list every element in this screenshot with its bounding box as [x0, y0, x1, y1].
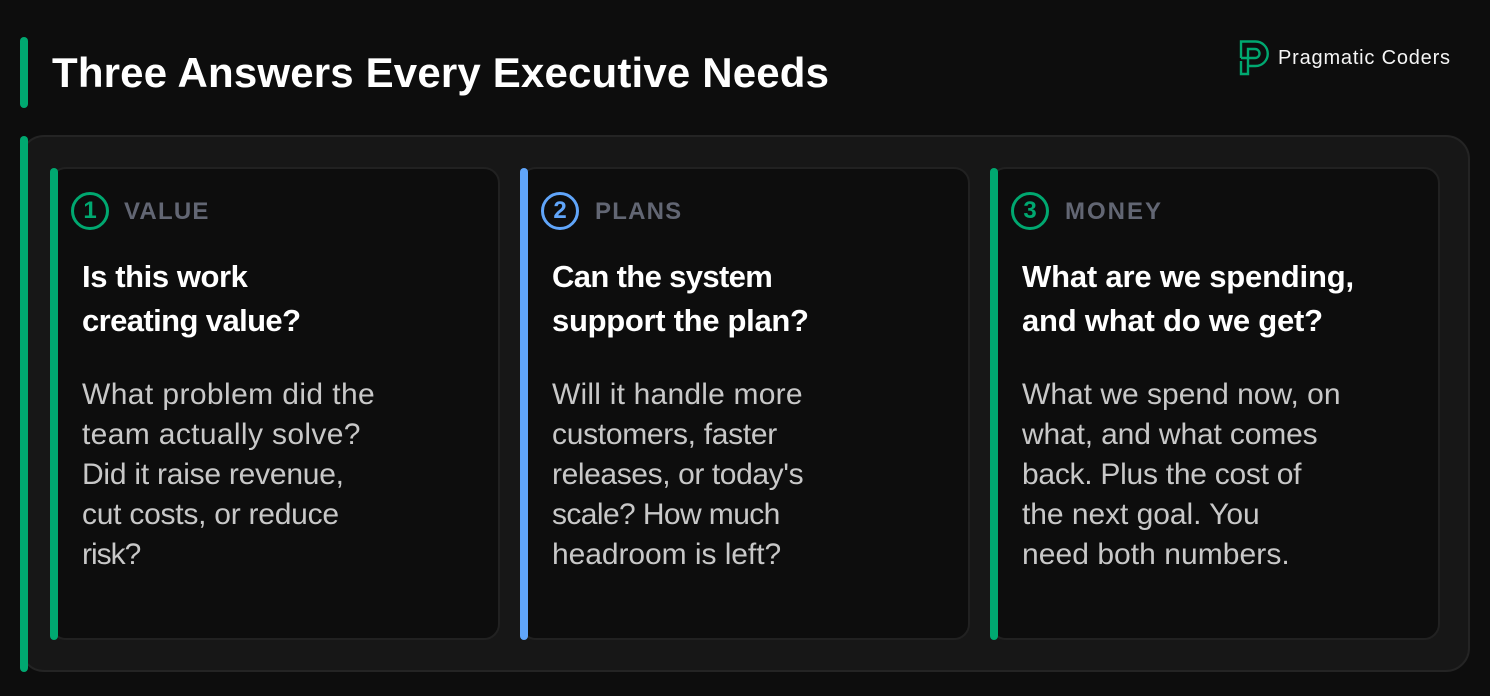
panel: three answers container — [20, 135, 1470, 672]
panel accent bar — [20, 136, 28, 672]
panel: money card — [990, 167, 1440, 640]
body text: releases, or today's — [552, 458, 803, 491]
title: Three Answers Every Executive Needs — [52, 49, 829, 96]
body text: team actually solve? — [82, 418, 361, 451]
question heading: What are we spending, — [1022, 259, 1354, 294]
logo: Pragmatic Coders — [1240, 40, 1451, 76]
number badge 1 — [71, 192, 109, 230]
body text: cut costs, or reduce — [82, 498, 339, 531]
card accent bar — [520, 168, 528, 640]
label: value: VALUE — [124, 198, 210, 225]
title accent bar — [20, 37, 28, 108]
card background — [50, 167, 500, 640]
panel: value card — [50, 167, 500, 640]
body text: need both numbers. — [1022, 538, 1290, 571]
body text: risk? — [82, 538, 140, 571]
question heading: support the plan? — [552, 303, 809, 338]
body text: back. Plus the cost of — [1022, 458, 1301, 491]
logo wordmark: Pragmatic Coders — [1278, 47, 1451, 69]
number badge 3: 3 — [1023, 197, 1037, 224]
body text: scale? How much — [552, 498, 780, 531]
body text: headroom is left? — [552, 538, 781, 571]
number badge 1: 1 — [83, 197, 97, 224]
question heading: Is this work — [82, 259, 248, 294]
body text — [552, 378, 803, 571]
body text: Will it handle more — [552, 378, 803, 411]
number badge 2: 2 — [553, 197, 567, 224]
body text — [82, 378, 375, 571]
card background — [990, 167, 1440, 640]
body text: What we spend now, on — [1022, 378, 1341, 411]
body text: what, and what comes — [1022, 418, 1318, 451]
question heading: and what do we get? — [1022, 303, 1323, 338]
body text: the next goal. You — [1022, 498, 1260, 531]
question heading — [1022, 259, 1354, 338]
card accent bar — [50, 168, 58, 640]
icon: P mark — [1240, 40, 1269, 76]
body text: What problem did the — [82, 378, 375, 411]
label: money: MONEY — [1065, 198, 1163, 225]
body text — [1022, 378, 1341, 571]
number badge 3 — [1011, 192, 1049, 230]
question heading: Can the system — [552, 259, 772, 294]
card background — [520, 167, 970, 640]
card accent bar — [990, 168, 998, 640]
question heading: creating value? — [82, 303, 300, 338]
number badge 2 — [541, 192, 579, 230]
question heading — [552, 259, 809, 338]
label: plans: PLANS — [595, 198, 682, 225]
body text: customers, faster — [552, 418, 777, 451]
question heading — [82, 259, 300, 338]
panel: plans card — [520, 167, 970, 640]
body text: Did it raise revenue, — [82, 458, 344, 491]
